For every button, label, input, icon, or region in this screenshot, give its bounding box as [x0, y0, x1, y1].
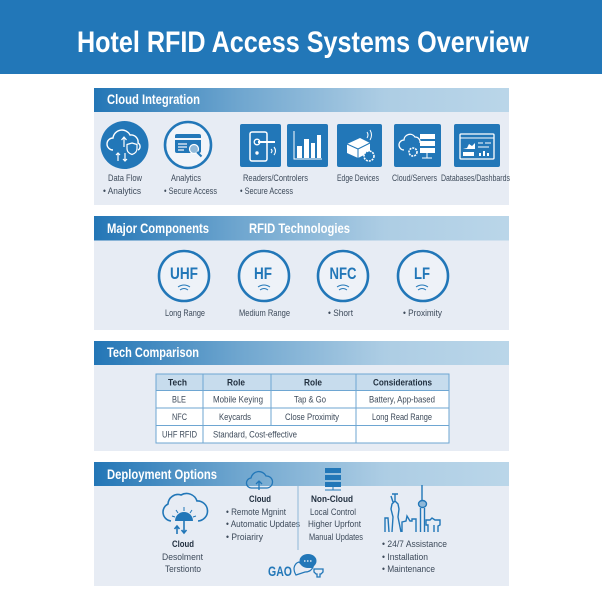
icon: small cloud	[246, 472, 273, 490]
comparison table: Tap & Go	[294, 394, 326, 404]
label: proprietary: • Proiariry	[226, 532, 263, 542]
comparison table: NFC	[172, 412, 187, 422]
label: edge devices: Edge Devices	[337, 173, 379, 183]
label: desolment: Desolment	[162, 552, 203, 562]
label: installation: • Installation	[382, 552, 428, 562]
heading: tech comparison: Tech Comparison	[107, 344, 199, 360]
icon: door reader	[240, 124, 281, 167]
icon: edge device	[337, 124, 382, 167]
comparison table: Battery, App-based	[369, 394, 435, 404]
label: readers controllers: Readers/Controlers	[243, 173, 308, 183]
title banner	[0, 0, 602, 74]
badge: LF	[398, 251, 448, 301]
panel: RFID technologies	[94, 216, 509, 330]
logo: GAO	[268, 554, 323, 579]
icon: analytics card	[165, 122, 211, 168]
comparison table: BLE	[172, 394, 186, 404]
badge: NFC	[318, 251, 368, 301]
label: proximity: • Proximity	[403, 308, 442, 318]
heading: RFID technologies: RFID Technologies	[249, 220, 350, 236]
panel: deployment options	[94, 462, 509, 586]
icon: dashboard	[454, 124, 500, 167]
divider	[297, 486, 299, 550]
icon: deployment cloud	[163, 493, 208, 534]
label: cloud center: Cloud	[249, 494, 271, 505]
icon: cloud servers	[394, 124, 441, 167]
comparison table: Tech	[168, 378, 187, 388]
heading: major components: Major Components	[107, 220, 209, 236]
label: cloud servers: Cloud/Servers	[392, 173, 437, 183]
panel: cloud integration	[94, 88, 510, 205]
label: assistance: • 24/7 Assistance	[382, 539, 447, 549]
label: data flow: Data Flow	[108, 173, 142, 183]
comparison table	[156, 374, 449, 443]
badge: LF: LF	[414, 265, 430, 283]
comparison table: Role	[304, 378, 322, 388]
label: manual updates: Manual Updates	[309, 532, 363, 542]
label: secure access: • Secure Access	[164, 186, 217, 196]
panel: tech comparison	[94, 341, 509, 451]
heading: cloud integration: Cloud Integration	[107, 91, 200, 107]
icon: bar chart	[287, 124, 328, 167]
label: higher upfront: Higher Uprfont	[308, 519, 361, 529]
badge: HF: HF	[254, 265, 272, 283]
icon: city skyline	[385, 485, 440, 532]
logo: GAO: GAO	[268, 564, 292, 579]
label: automatic updates: • Automatic Updates	[226, 519, 300, 529]
badge: HF	[239, 251, 289, 301]
comparison table: Considerations	[373, 378, 432, 388]
label: medium range: Medium Range	[239, 308, 290, 318]
label: remote management: • Remote Mgnint	[226, 507, 286, 517]
label: long range: Long Range	[165, 308, 205, 318]
comparison table: UHF RFID	[162, 430, 197, 440]
label: short: • Short	[328, 308, 353, 318]
label: maintenance: • Maintenance	[382, 564, 435, 574]
label: analytics: Analytics	[171, 173, 201, 183]
title: Hotel RFID Access Systems Overview	[77, 26, 530, 59]
comparison table: Standard, Cost-effective	[213, 430, 297, 440]
comparison table: Long Read Range	[372, 412, 432, 422]
icon: data flow	[100, 121, 148, 169]
comparison table: Role	[227, 378, 245, 388]
label: cloud left: Cloud	[172, 539, 194, 550]
label: local control: Local Control	[310, 507, 356, 517]
badge: UHF: UHF	[170, 265, 198, 283]
label: non-cloud: Non-Cloud	[311, 494, 353, 505]
heading: deployment options: Deployment Options	[107, 466, 217, 482]
label: secure access 2: • Secure Access	[240, 186, 293, 196]
label: terstionto: Terstionto	[165, 564, 201, 574]
badge: NFC: NFC	[330, 265, 357, 283]
icon: server stack	[325, 468, 341, 490]
comparison table: Close Proximity	[285, 412, 339, 422]
badge: UHF	[159, 251, 209, 301]
comparison table: Keycards	[219, 412, 251, 422]
comparison table: Mobile Keying	[213, 394, 263, 404]
label: analytics bullet: • Analytics	[103, 186, 141, 196]
label: databases dashboards: Databases/Dashbards	[441, 173, 510, 183]
